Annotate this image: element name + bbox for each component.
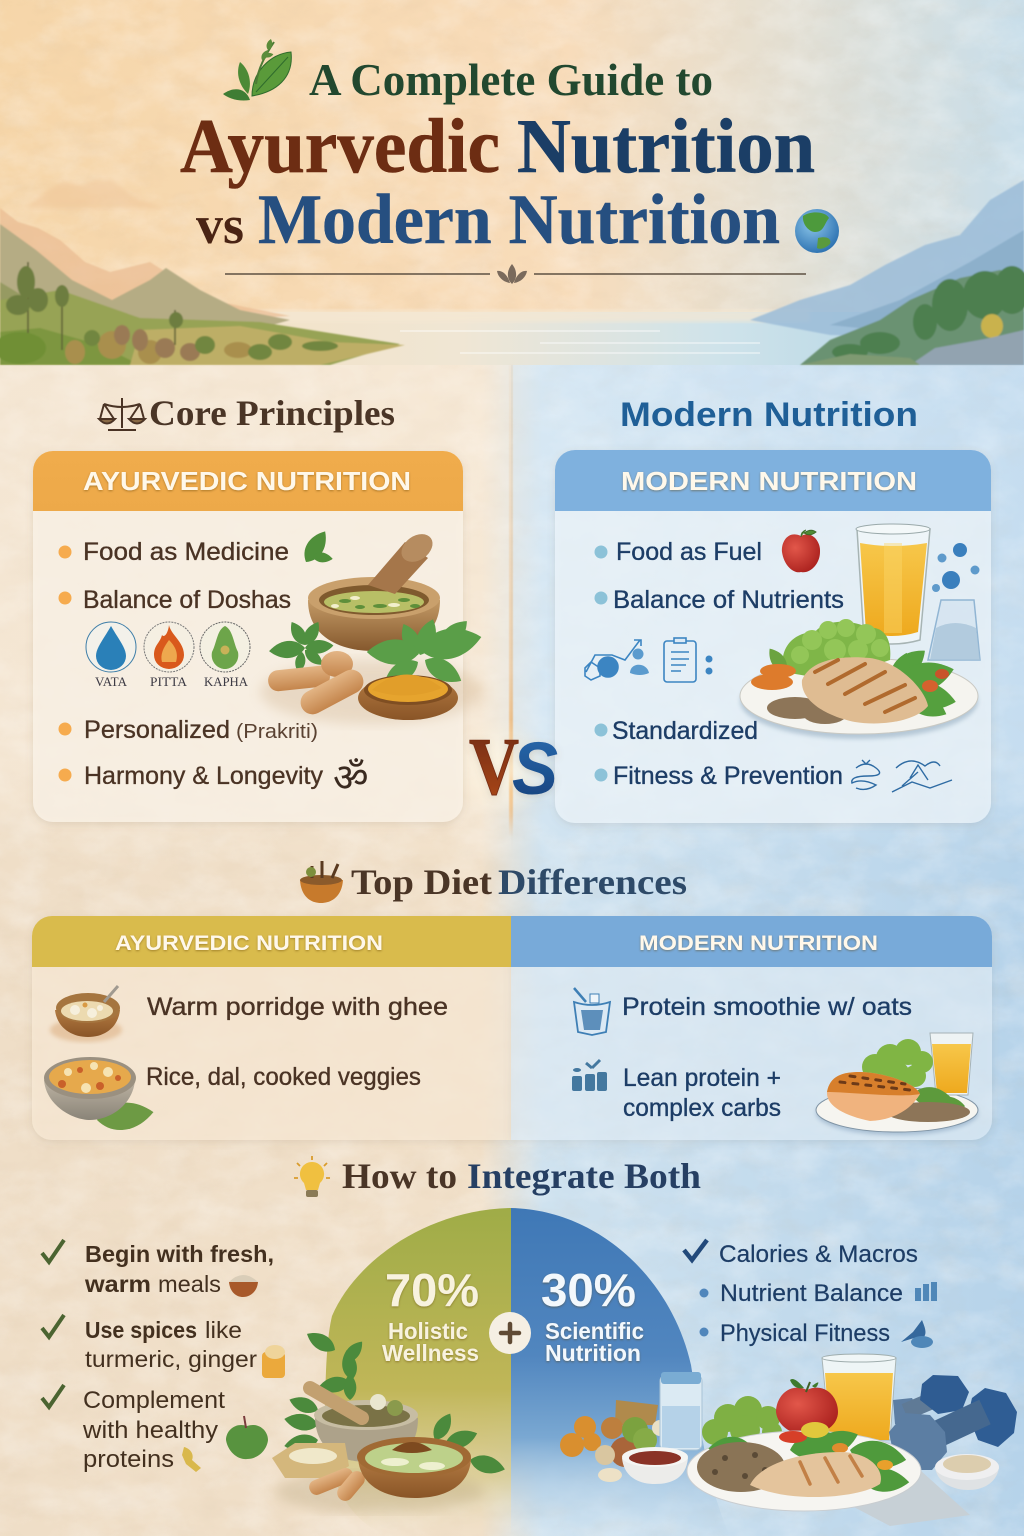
header label: AYURVEDIC NUTRITION [83,466,411,496]
panel: diet comparison table [32,916,992,1140]
right mountains [750,180,1024,365]
carrots [751,664,796,690]
tip: spices: turmeric, ginger [85,1346,257,1372]
tip: fresh warm meals: warm [84,1271,151,1297]
heading: top diet differences [300,861,687,903]
icon: rice and dal bowl [44,1057,155,1133]
icons: data chart and clipboard [585,638,712,682]
list item: food as fuel: Food as Fuel [616,538,762,566]
list item: food as fuel [594,530,820,572]
protein jar [928,600,980,660]
juice glass [856,524,930,644]
left mountains [0,180,405,365]
tip: fresh warm meals [42,1240,274,1297]
illustration: modern still life [560,1354,1017,1526]
30 percent label: 30% [541,1264,636,1316]
tip: healthy proteins: Complement [83,1387,225,1414]
heading: top diet differences: Differences [498,862,687,902]
list item: harmony and longevity: ॐ [333,756,369,801]
list item: fitness and prevention [594,760,952,792]
lettuce [702,1396,782,1445]
list item: food as medicine [58,527,333,567]
icon: leaf sprig [223,38,291,101]
napkin [850,1470,970,1526]
tip: spices: like [205,1317,242,1343]
heading line 3: vs [196,195,244,255]
title [180,38,839,284]
row: rice dal: Rice, dal, cooked veggies [146,1063,421,1091]
list item: personalized [58,716,318,744]
tip: healthy proteins [42,1385,268,1473]
70 percent label: Holistic [388,1318,468,1344]
dosha labels: VATA [95,674,128,689]
list: modern integration tips [684,1240,937,1348]
30 percent label [541,1264,644,1366]
apple [776,1379,838,1434]
lettuce [783,622,890,680]
heading: core principles: Core Principles [149,393,395,433]
tip: spices [42,1315,285,1378]
list item: harmony and longevity: Harmony & Longevity [84,762,323,790]
row: lean protein: Lean protein + [623,1064,781,1092]
panel: core principles heading [99,393,918,434]
heading: top diet differences: Top Diet [351,862,492,902]
grains [767,697,847,724]
icons: vata pitta kapha [86,622,250,689]
list item: food as medicine: Food as Medicine [83,538,289,566]
row: lean protein [623,1064,781,1122]
heading line 2: Ayurvedic [180,103,500,189]
dosha labels: KAPHA [204,674,249,689]
panel backdrops [0,365,1024,860]
tip: calories and macros: Calories & Macros [719,1241,918,1268]
icon: scales [99,398,145,430]
heading: how to integrate both [294,1156,701,1197]
30 percent label: Nutrition [545,1340,641,1366]
tip: healthy proteins: with healthy [82,1417,218,1444]
grilled chicken [802,657,928,723]
card header [555,450,991,511]
heading: how to integrate both: How to [342,1156,457,1196]
plate [740,663,978,739]
tip: fresh warm meals: Begin with fresh, [85,1241,274,1267]
illustration: salmon plate [816,1033,978,1135]
list item: balance of nutrients: Balance of Nutrients [613,586,844,614]
list item: standardized: Standardized [612,717,758,745]
icon: spice bowl [300,861,343,903]
list item: fitness and prevention: Fitness & Prevention [613,762,843,790]
list item: harmony and longevity [58,756,369,801]
juice glass [822,1354,896,1440]
blue half [511,1208,730,1536]
dosha labels: PITTA [150,674,188,689]
list item: personalized: Personalized [84,716,230,744]
shaker bottle [660,1372,702,1450]
list item: personalized: (Prakriti) [236,721,318,743]
panel: 70/30 split circle [325,1208,730,1536]
header label: MODERN NUTRITION [621,466,917,496]
illustration: juice, jar, chicken plate [740,524,980,739]
green half [325,1208,511,1536]
header label: ayurvedic: AYURVEDIC NUTRITION [115,932,383,955]
landscape [0,180,1024,365]
blue molecules [932,543,980,592]
dumbbells [889,1375,1017,1470]
card header [33,451,463,511]
illustration: mortar, herbs, turmeric [260,528,484,724]
dosha labels [95,674,249,689]
side salad [883,642,959,724]
icon: bars [572,1060,607,1091]
row: lean protein: complex carbs [623,1094,781,1122]
table header: ayurvedic [32,916,511,967]
water [0,312,1024,365]
row: protein smoothie: Protein smoothie w/ oats [622,993,912,1021]
list: ayurvedic integration tips [42,1240,285,1473]
illustration: ayurvedic still life [272,1327,507,1512]
tip: fresh warm meals: meals [158,1271,221,1297]
icon: light bulb [294,1156,330,1197]
panel: modern card [555,450,991,823]
vs emblem [469,721,558,812]
row: warm porridge: Warm porridge with ghee [147,993,448,1021]
heading line 2 [180,103,815,189]
vs emblem: S [512,727,558,810]
vs emblem: V [469,721,519,812]
panel: ayurvedic card [33,451,484,822]
plate [687,1422,921,1511]
heading: modern nutrition: Modern Nutrition [620,396,918,434]
heading line 1: A Complete Guide to [309,55,713,105]
nuts [560,1400,668,1482]
30 percent label: Scientific [545,1318,644,1344]
icon: porridge bowl [50,986,122,1042]
small bowl of berries [622,1447,688,1484]
heading line 2: Nutrition [517,103,815,189]
header label: modern: MODERN NUTRITION [639,932,878,955]
70 percent label: 70% [385,1264,479,1316]
70 percent label: Wellness [382,1340,479,1366]
heading line 3: Modern Nutrition [258,181,780,259]
tip: healthy proteins: proteins [83,1446,174,1473]
tip: spices: Use spices [85,1317,197,1343]
tip: physical fitness: Physical Fitness [720,1320,890,1347]
heading: how to integrate both: Integrate Both [467,1156,701,1196]
oats bowl [935,1454,999,1490]
plus badge [489,1312,531,1354]
table header: modern [511,916,992,967]
70 percent label [382,1264,479,1366]
icon: globe [795,209,839,253]
tip: nutrient balance: Nutrient Balance [720,1280,903,1307]
divider [225,264,806,284]
list item: balance of doshas: Balance of Doshas [83,586,291,614]
icon: smoothie cup [574,988,610,1035]
